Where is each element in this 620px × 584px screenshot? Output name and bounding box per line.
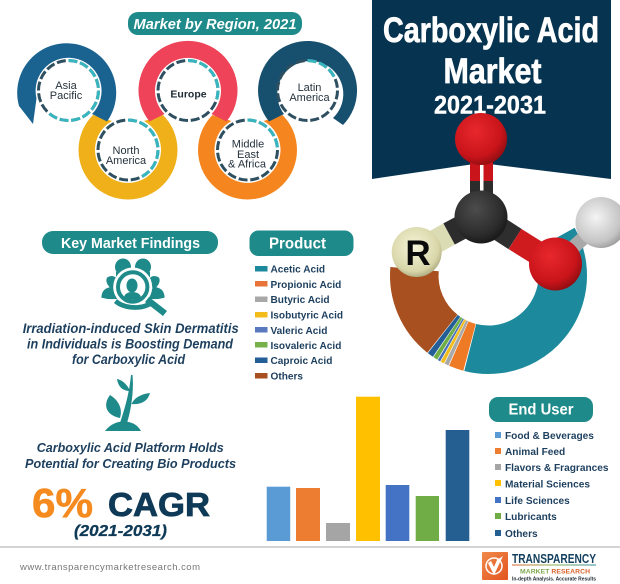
- text: finding one: for Carboxylic Acid: [72, 352, 186, 367]
- ring: asia pacific: Pacific: [50, 90, 83, 102]
- legend: end user: Flavors & Fragrances: [505, 463, 609, 474]
- text: finding two: Carboxylic Acid Platform Holds: [37, 440, 224, 455]
- callout: cagr: (2021-2031): [74, 523, 167, 540]
- legend: end user: Food & Beverages: [505, 431, 594, 442]
- callout: cagr: 6%: [32, 480, 93, 526]
- ring: europe: Europe: [170, 88, 207, 100]
- text: finding one: Irradiation-induced Skin Dermatitis: [23, 321, 239, 336]
- heading: end user: End User: [508, 402, 574, 418]
- title banner: Market: [444, 52, 542, 91]
- footer url: www.transparencymarketresearch.com: [19, 562, 200, 573]
- legend: end user: Material Sciences: [505, 480, 590, 490]
- logo: TRANSPARENCY: [512, 551, 596, 566]
- heading: end user: [489, 397, 593, 422]
- ring: north america: North: [113, 145, 139, 157]
- legend: product: [255, 264, 343, 382]
- legend: end user: Life Sciences: [505, 496, 570, 507]
- ring: middle east and africa: East: [237, 149, 259, 161]
- text: finding one: in Individuals is Boosting Demand: [27, 336, 234, 352]
- donut chart: product share: [384, 171, 593, 380]
- text: finding two: Potential for Creating Bio Products: [25, 456, 236, 471]
- molecule illustration: R: [405, 234, 431, 273]
- logo: [482, 551, 596, 582]
- legend: end user: Animal Feed: [505, 447, 565, 458]
- ring: north america: America: [106, 155, 147, 167]
- bar chart: end user: [267, 397, 469, 541]
- ring: asia pacific: [17, 43, 116, 124]
- ring: latin america: [258, 41, 357, 125]
- legend: end user: Others: [505, 529, 538, 540]
- icon: people under magnifier: [101, 258, 167, 316]
- legend: product: Others: [270, 372, 303, 382]
- heading: key market findings: [42, 231, 218, 254]
- heading: product: Product: [269, 236, 327, 252]
- title banner: [372, 0, 611, 179]
- legend: product: Butyric Acid: [270, 295, 330, 306]
- text: finding one: [23, 321, 239, 367]
- legend: product: Valeric Acid: [270, 326, 327, 337]
- legend: product: Caproic Acid: [270, 356, 332, 367]
- ring: north america: [79, 115, 178, 200]
- legend: end user: Lubricants: [505, 512, 557, 523]
- legend: product: Acetic Acid: [270, 264, 325, 276]
- molecule illustration: [392, 113, 620, 290]
- legend: end user: [495, 431, 609, 540]
- ring: middle east and africa: Middle: [232, 138, 264, 150]
- ring: asia pacific: Asia: [55, 80, 78, 92]
- heading: market by region: Market by Region, 2021: [134, 16, 296, 33]
- title banner: 2021-2031: [434, 92, 546, 120]
- icon: sprouting plant: [105, 375, 150, 431]
- heading: product: [250, 230, 354, 256]
- callout: cagr: [32, 480, 210, 540]
- callout: cagr: CAGR: [108, 486, 210, 523]
- ring: middle east and africa: [198, 115, 297, 200]
- legend: product: Propionic Acid: [270, 280, 341, 291]
- legend: product: Isovaleric Acid: [270, 341, 341, 352]
- text: finding two: [25, 440, 236, 471]
- ring: middle east and africa: & Africa: [228, 158, 267, 170]
- logo subtitle: MARKET RESEARCH: [520, 568, 590, 576]
- ring: europe: [138, 41, 238, 122]
- chart: regional rings: [17, 41, 357, 200]
- ring: latin america: Latin: [298, 82, 321, 94]
- ring: latin america: America: [289, 92, 331, 104]
- logo: In-depth Analysis. Accurate Results: [512, 576, 596, 582]
- legend: product: Isobutyric Acid: [270, 310, 343, 322]
- heading: key market findings: Key Market Findings: [61, 235, 200, 252]
